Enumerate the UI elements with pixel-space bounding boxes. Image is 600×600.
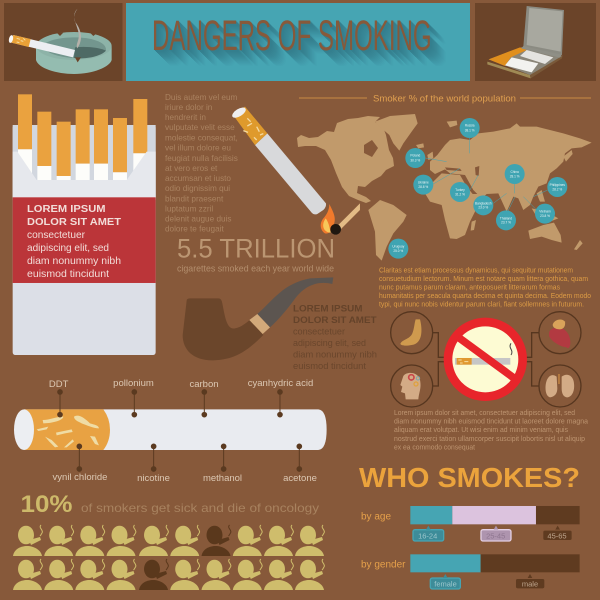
flame — [321, 204, 335, 234]
icon: cigarette case — [487, 6, 564, 78]
stat caption: cigarettes smoked each year world wide — [177, 264, 334, 274]
text block: claritas: typi, qui nunc nobis videntur parum clari, fiant sollemnes in futurum. — [379, 302, 584, 308]
pack label text: LOREM IPSUM — [27, 204, 106, 215]
match stick — [337, 203, 360, 230]
text block: pipe caption: LOREM IPSUM — [293, 302, 363, 314]
map: greenland — [375, 114, 418, 151]
cigarette body — [24, 409, 327, 450]
text block: duis autem: blandit praesent — [165, 194, 224, 204]
text block: duis autem: at vero eros et — [165, 164, 218, 173]
text block: lorem ipsum — [394, 410, 588, 452]
text block: lorem ipsum: Lorem ipsum dolor sit amet, consectetuer adipiscing elit, sed — [394, 410, 575, 417]
map: inland seas — [445, 166, 479, 176]
panel: ashtray — [4, 3, 122, 81]
map: japan and british isles — [427, 121, 573, 162]
text block: lorem ipsum: aliquam erat volutpat. Ut wisi enim ad minim veniam, quis — [394, 427, 568, 434]
map bubbles: 28.8 % — [418, 185, 428, 189]
section heading: smoker percent: Smoker % of the world population — [373, 94, 516, 104]
text block: duis autem: vulputate velit esse — [165, 123, 235, 132]
map: south america — [368, 200, 407, 261]
map: madagascar — [471, 220, 476, 231]
map: africa — [425, 173, 484, 239]
text block: duis autem: feugiat nulla facilisis — [165, 154, 238, 163]
cigarette body — [255, 133, 326, 214]
world map — [297, 114, 592, 261]
map bubbles: Thailand — [500, 217, 512, 221]
text block: duis autem: dolore te feugait — [165, 224, 224, 234]
map bubbles: 23.7 % — [501, 221, 511, 225]
chemical labels: vynil chloride — [53, 472, 107, 483]
map: north america — [297, 116, 394, 203]
text block: pipe caption: diam nonummy nibh — [293, 348, 377, 360]
map: australia and islands — [528, 190, 583, 250]
icon: pipe — [183, 277, 333, 360]
map bubbles: 23.0 % — [478, 206, 488, 210]
text block: duis autem: molestie consequat, — [165, 134, 238, 142]
icon: head with gears — [391, 365, 433, 407]
pack label text: consectetuer — [27, 230, 86, 241]
chemical labels: cyanhydric acid — [248, 378, 313, 389]
pictogram: smokers — [13, 525, 324, 590]
chart: by gender: male — [522, 580, 538, 588]
pack label text: euismod tincidunt — [27, 269, 109, 280]
map bubbles: China — [511, 170, 519, 174]
text block: lorem ipsum: ex ea commodo consequat — [394, 444, 475, 452]
text block: duis autem: luptatum zzril — [165, 204, 213, 214]
map bubbles: 23.8 % — [540, 214, 550, 218]
text block: pipe caption: consectetuer — [293, 326, 345, 336]
text block: claritas: humanitatis per seacula quarta decima et quinta decima. Eodem modo — [379, 293, 591, 300]
text block: duis autem: delenit augue duis — [165, 214, 231, 224]
text block: duis autem: accumsan et iusto — [165, 174, 231, 183]
cigarette pack — [13, 94, 156, 355]
cigarette filter — [232, 107, 267, 145]
map bubbles: Poland — [410, 154, 420, 158]
map bubbles: Russia — [465, 124, 475, 128]
text block: duis autem: vel illum dolore eu — [165, 144, 231, 152]
icon: lungs — [539, 365, 581, 407]
chart: by gender — [361, 554, 580, 589]
pack label text: diam nonummy nibh — [27, 256, 121, 267]
anatomy of cigarette — [14, 378, 327, 484]
text block: duis autem — [165, 93, 238, 234]
text block: claritas: Claritas est etiam processus dynamicus, qui sequitur mutationem — [379, 268, 573, 274]
text block: duis autem: odio dignissim qui — [165, 184, 230, 193]
health effects diagram — [391, 312, 581, 407]
map: hudson bay — [364, 140, 378, 157]
map bubbles: Ukraine — [418, 181, 429, 185]
pack label text: DOLOR SIT AMET — [27, 217, 122, 228]
chemical labels: nicotine — [137, 473, 170, 484]
text block: duis autem: hendrerit in — [165, 113, 206, 122]
icon: stomach — [391, 312, 433, 354]
text block: lorem ipsum: nostrud exerci tation ullamcorper suscipit lobortis nisl ut aliquip — [394, 436, 585, 443]
map bubbles: Philippines — [550, 183, 565, 187]
chart: by gender: female — [434, 580, 457, 588]
pack cigarettes — [18, 94, 147, 180]
icon: no smoking sign — [444, 318, 527, 401]
pins — [58, 390, 302, 471]
text block: claritas: consuetudium lectorum. Minum est notare quam littera gothica, quam — [379, 276, 588, 283]
burning cigarette and match — [231, 105, 360, 235]
map bubbles: 38.1 % — [465, 129, 475, 133]
map bubbles: 31.2 % — [455, 192, 465, 196]
heading: who smokes: WHO SMOKES? — [359, 462, 580, 493]
icon: heart — [539, 312, 581, 354]
text block: pipe caption: adipiscing elit, sed — [293, 337, 366, 348]
map bubbles: 28.2 % — [552, 187, 562, 191]
map bubbles: Uruguay — [392, 245, 405, 249]
text block: pipe caption: DOLOR SIT AMET — [293, 314, 377, 325]
map: connector lines — [425, 138, 548, 215]
pack label text — [27, 204, 122, 280]
panel: title background — [126, 3, 470, 81]
cigarette filter — [24, 409, 110, 450]
chart: by age: by age — [361, 512, 391, 522]
chemical labels — [49, 378, 317, 484]
match head — [330, 224, 341, 235]
text block: pipe caption — [293, 302, 377, 371]
chart: by gender: by gender — [361, 560, 406, 570]
map: iceland — [416, 143, 424, 148]
map bubbles: 25.0 % — [393, 249, 403, 253]
chemical labels: acetone — [283, 473, 317, 484]
panel: open cigarette case — [475, 3, 596, 81]
map bubbles: Bangladesh — [475, 201, 492, 205]
chart: by age: 25-45 — [486, 532, 505, 540]
map bubbles: Turkey — [455, 188, 465, 192]
chart: by age — [361, 506, 580, 541]
icon: ashtray with cigarette — [8, 9, 112, 74]
text block: claritas — [379, 268, 591, 308]
map bubbles — [388, 118, 567, 259]
chemical labels: methanol — [203, 473, 242, 484]
map: eurasia — [430, 123, 592, 212]
chart: by age: 45-65 — [547, 532, 567, 540]
stat: 10 percent: 10% — [20, 491, 72, 518]
map bubbles: 30.3 % — [410, 158, 420, 162]
chart: by age: 16-24 — [418, 532, 437, 540]
stat: 10 percent: of smokers get sick and die of oncology — [81, 501, 319, 515]
text block: pipe caption: euismod tincidunt — [293, 360, 366, 371]
text block: duis autem: iriure dolor in — [165, 103, 213, 112]
map bubbles: 28.1 % — [510, 174, 520, 178]
chemical labels: carbon — [189, 379, 219, 390]
text block: duis autem: Duis autem vel eum — [165, 93, 238, 102]
stat: 10 percent — [20, 491, 319, 518]
chemical labels: DDT — [49, 379, 69, 390]
text block: lorem ipsum: diam nonummy nibh euismod tincidunt ut laoreet dolore magna — [394, 418, 588, 426]
pack label text: adipiscing elit, sed — [27, 243, 109, 254]
text block: claritas: nunc putamus parum claram, anteposuerit litterarum formas — [379, 284, 560, 292]
chemical labels: pollonium — [113, 378, 154, 389]
title: DANGERS OF SMOKING — [152, 12, 432, 60]
stat: 5.5 trillion: 5.5 TRILLION — [177, 234, 335, 264]
map bubbles: Vietnam — [539, 210, 551, 214]
